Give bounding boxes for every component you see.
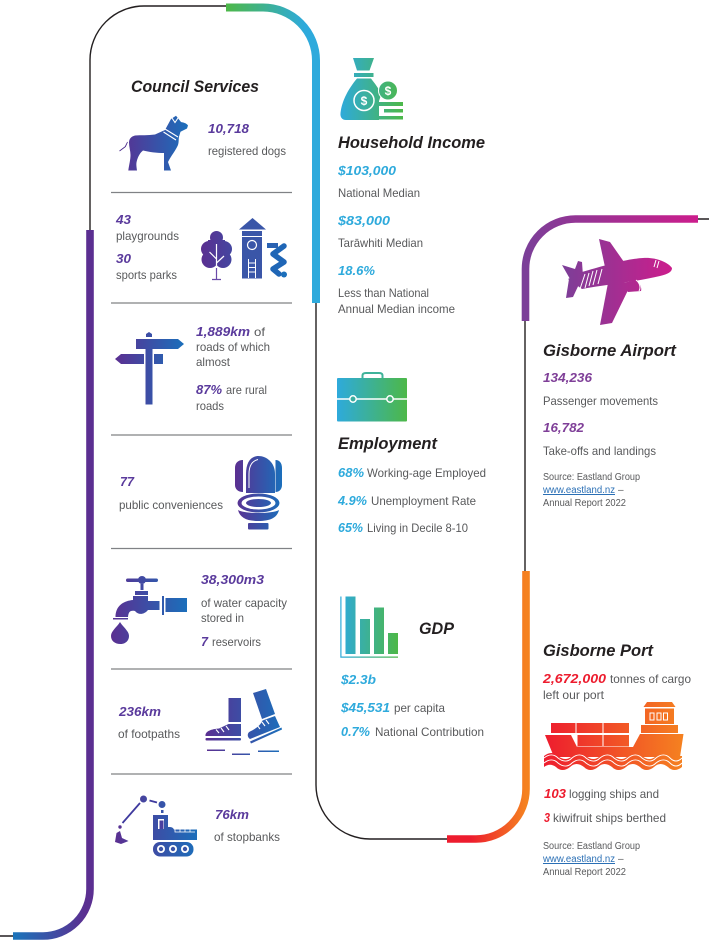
stat: playgrounds and sports parks: 30: [116, 251, 132, 266]
stat: roads: [196, 324, 270, 413]
heading: employment: Employment: [338, 434, 438, 453]
stat: water capacity: 38,300m3: [201, 572, 265, 587]
stat: tonnes of cargo: 2,672,000: [542, 671, 607, 686]
stat: stopbanks: [214, 807, 280, 844]
heading: gisborne port: Gisborne Port: [543, 641, 654, 660]
stat: playgrounds and sports parks: playgrounds: [116, 229, 179, 243]
stat: working-age employed: 68%: [338, 465, 364, 480]
stat: roads: 87%: [196, 382, 222, 397]
stat: footpaths: of footpaths: [118, 727, 180, 741]
stat: national median: National Median: [338, 186, 420, 200]
stat: passenger movements: 134,236: [543, 370, 593, 385]
stat: footpaths: 236km: [118, 704, 161, 719]
stat: unemployment rate: [337, 493, 476, 508]
stat: logging ships: 103: [544, 786, 567, 801]
icon: toilet: [235, 456, 282, 530]
icon: tree and playground: [201, 218, 287, 280]
timeline: red to orange segment: [447, 571, 526, 839]
stat: national median: $103,000: [337, 163, 397, 178]
stat: passenger movements: [543, 370, 658, 408]
panel: employment: [337, 373, 486, 535]
stat: unemployment rate: 4.9%: [337, 493, 367, 508]
stat: tonnes of cargo: [542, 671, 691, 702]
stat: gdp total: $2.3b: [340, 672, 376, 687]
timeline: purple to magenta segment: [526, 219, 698, 321]
stat: national contribution: National Contribution: [375, 725, 484, 739]
stat: less than national: Annual Median income: [338, 302, 455, 316]
icon: money bag: $: [385, 84, 392, 98]
stat: roads: of: [254, 325, 266, 339]
source note: port: [542, 841, 640, 878]
stat: water capacity: 7: [201, 634, 209, 649]
stat: water capacity: [201, 572, 287, 649]
stat: kiwifruit ships: 3: [544, 810, 551, 825]
stat: water capacity: of water capacity: [201, 596, 287, 610]
stat: living in decile: 65%: [338, 520, 363, 535]
icon: money bag: [340, 58, 403, 120]
stat: public conveniences: [119, 474, 223, 512]
stat: unemployment rate: Unemployment Rate: [371, 494, 476, 508]
stat: stopbanks: of stopbanks: [214, 830, 280, 844]
source note: port: Annual Report 2022: [543, 867, 626, 878]
icon: walking shoes: [205, 689, 282, 755]
icon: bar chart: [340, 596, 398, 658]
icon: dog: [120, 116, 188, 170]
stat: playgrounds and sports parks: sports parks: [116, 268, 177, 282]
stat: take-offs and landings: Take-offs and landings: [543, 444, 656, 458]
stat: per capita: [340, 700, 445, 715]
stat: footpaths: [118, 704, 180, 741]
stat: water capacity: reservoirs: [212, 635, 261, 649]
stat: logging ships: logging ships and: [569, 787, 659, 801]
stat: roads: roads: [196, 399, 224, 413]
stat: working-age employed: Working-age Employed: [367, 466, 486, 480]
icon: cargo ship: [544, 702, 684, 770]
icon: water tap: [111, 576, 187, 644]
stat: living in decile: [338, 520, 468, 535]
stat: kiwifruit ships: kiwifruit ships berthed: [553, 811, 666, 825]
heading: council services: Council Services: [131, 77, 259, 96]
heading: gdp: GDP: [419, 619, 455, 638]
stat: registered dogs: registered dogs: [208, 144, 286, 158]
stat: living in decile: Living in Decile 8-10: [367, 521, 468, 535]
stat: roads: 1,889km: [196, 324, 250, 339]
stat: less than national: Less than National: [338, 286, 429, 300]
stat: national contribution: 0.7%: [341, 724, 370, 739]
timeline: green to blue segment: [226, 8, 316, 303]
icon: money bag: $: [361, 94, 368, 108]
panel: gisborne airport: [542, 239, 677, 509]
stat: tarawhiti median: [337, 213, 423, 250]
stat: less than national: [338, 263, 455, 316]
stat: registered dogs: 10,718: [208, 121, 250, 136]
source note: port: –: [618, 854, 624, 865]
icon: briefcase: [337, 373, 407, 422]
stat: roads: almost: [196, 355, 231, 369]
source note: airport: Source: Eastland Group: [543, 472, 640, 483]
stat: tarawhiti median: $83,000: [337, 213, 391, 228]
icon: excavator: [115, 796, 197, 856]
source note: airport: –: [618, 485, 624, 496]
stat: tonnes of cargo: tonnes of cargo: [610, 672, 691, 686]
panel: household income: [337, 58, 485, 316]
stat: registered dogs: [208, 121, 286, 158]
stat: tonnes of cargo: left our port: [543, 688, 605, 702]
stat: national contribution: [341, 724, 484, 739]
source note: airport: [542, 472, 640, 509]
panel: council services: [111, 77, 292, 856]
source note: port: www.eastland.nz: [542, 854, 615, 865]
stat: passenger movements: Passenger movements: [543, 394, 658, 408]
stat: roads: roads of which: [196, 340, 270, 354]
heading: gisborne airport: Gisborne Airport: [543, 341, 677, 360]
stat: less than national: 18.6%: [338, 263, 375, 278]
stat: take-offs and landings: 16,782: [543, 420, 585, 435]
stat: playgrounds and sports parks: [115, 212, 179, 282]
timeline: purple left segment: [13, 230, 90, 936]
icon: plane: [562, 239, 672, 325]
stat: per capita: per capita: [394, 701, 445, 715]
panel: gisborne port: [542, 641, 691, 878]
stat: public conveniences: 77: [120, 474, 135, 489]
source note: port: Source: Eastland Group: [543, 841, 640, 852]
icon: signpost: [115, 332, 184, 404]
stat: tarawhiti median: Tarāwhiti Median: [338, 236, 423, 250]
source note: airport: www.eastland.nz: [542, 485, 615, 496]
stat: public conveniences: public conveniences: [119, 498, 223, 512]
stat: national median: [337, 163, 420, 200]
stat: roads: are rural: [226, 383, 267, 397]
source note: airport: Annual Report 2022: [543, 498, 626, 509]
stat: take-offs and landings: [543, 420, 656, 458]
stat: stopbanks: 76km: [215, 807, 249, 822]
stat: playgrounds and sports parks: 43: [115, 212, 132, 227]
panel: gdp: [340, 596, 484, 739]
heading: household income: Household Income: [338, 133, 485, 152]
stat: water capacity: stored in: [201, 611, 244, 625]
stat: per capita: $45,531: [340, 700, 390, 715]
